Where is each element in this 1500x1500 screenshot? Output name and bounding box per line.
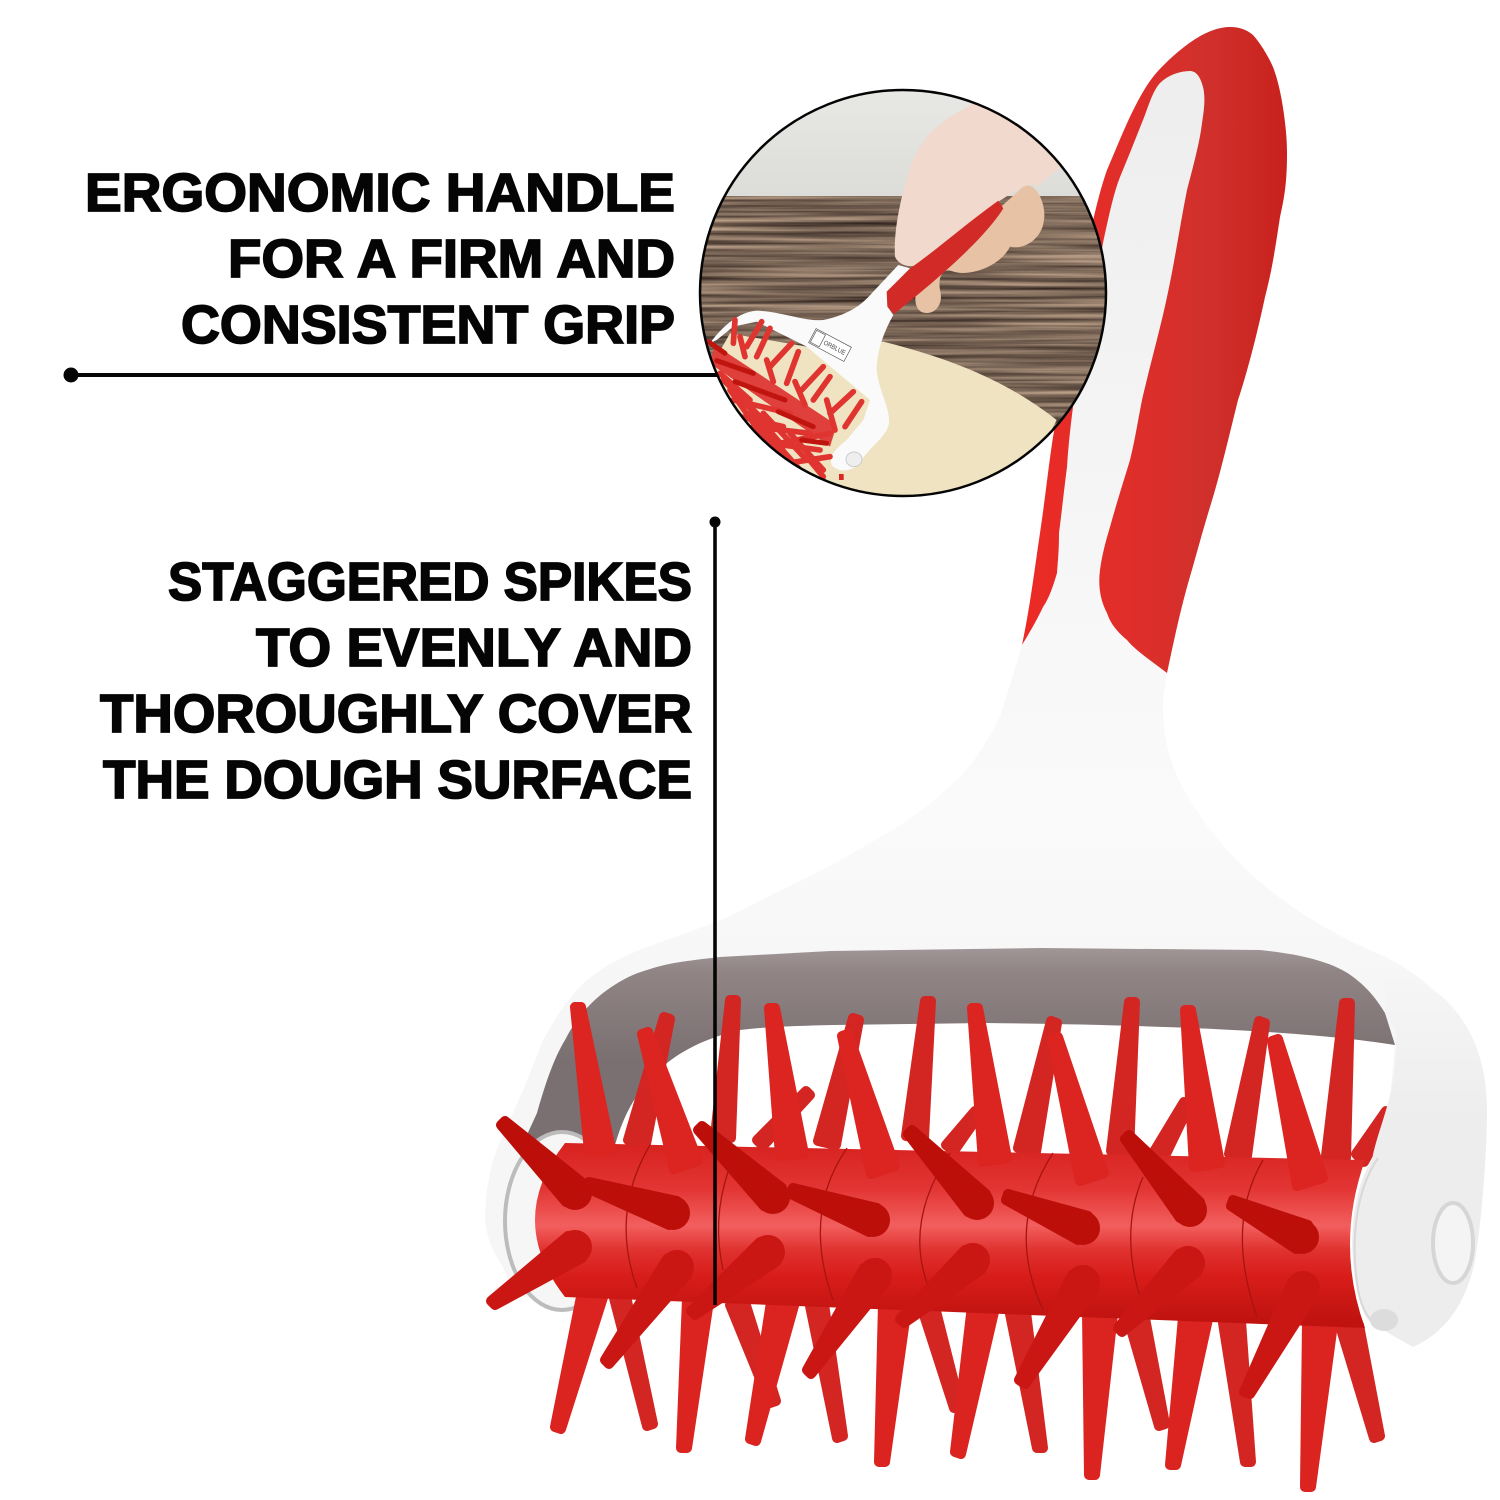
hand fingers behind handle — [915, 185, 1044, 313]
heading: ergonomic handle — [85, 164, 675, 355]
white mini roller frame — [710, 265, 910, 470]
dough sheet — [715, 333, 1057, 495]
mini spike tip — [839, 474, 844, 480]
heading: staggered spikes — [100, 553, 692, 810]
leader line: staggered spikes — [710, 516, 720, 1305]
heading: ergonomic handle: ERGONOMIC HANDLE — [85, 164, 675, 223]
mini red drum and spikes — [708, 320, 862, 477]
heading: ergonomic handle: CONSISTENT GRIP — [181, 296, 675, 355]
heading: ergonomic handle: FOR A FIRM AND — [228, 230, 675, 289]
red mini handle — [887, 201, 1003, 314]
red drum with segment seams — [535, 1143, 1365, 1328]
circular inset: hand using the roller — [698, 88, 1108, 498]
right arm of the frame with axle hole — [1352, 975, 1487, 1347]
white fork body — [485, 27, 1487, 1347]
palm and wrist — [895, 103, 1063, 266]
heading: staggered spikes: THOROUGHLY COVER — [100, 685, 692, 744]
heading: staggered spikes: THE DOUGH SURFACE — [103, 751, 692, 810]
grey underside of the frame — [520, 948, 1395, 1150]
leader line: ergonomic handle — [64, 368, 722, 382]
mini axle hole — [846, 452, 862, 467]
dark spikes facing the viewer — [501, 1121, 1314, 1249]
mini brand label — [809, 329, 851, 361]
spikes behind the drum — [614, 1000, 1390, 1462]
spikes pointing up from the drum — [575, 1007, 1323, 1186]
silver end cap ring — [505, 1132, 619, 1310]
mini brand label: ORBLUE — [822, 340, 847, 357]
product: roller handle and frame — [485, 27, 1487, 1347]
heading: staggered spikes: STAGGERED SPIKES — [168, 553, 692, 612]
heading: staggered spikes: TO EVENLY AND — [256, 619, 692, 678]
red handle grip — [1022, 27, 1287, 673]
spikes in front, pointing down — [555, 1282, 1333, 1487]
lower diagonal spikes — [491, 1235, 1315, 1394]
